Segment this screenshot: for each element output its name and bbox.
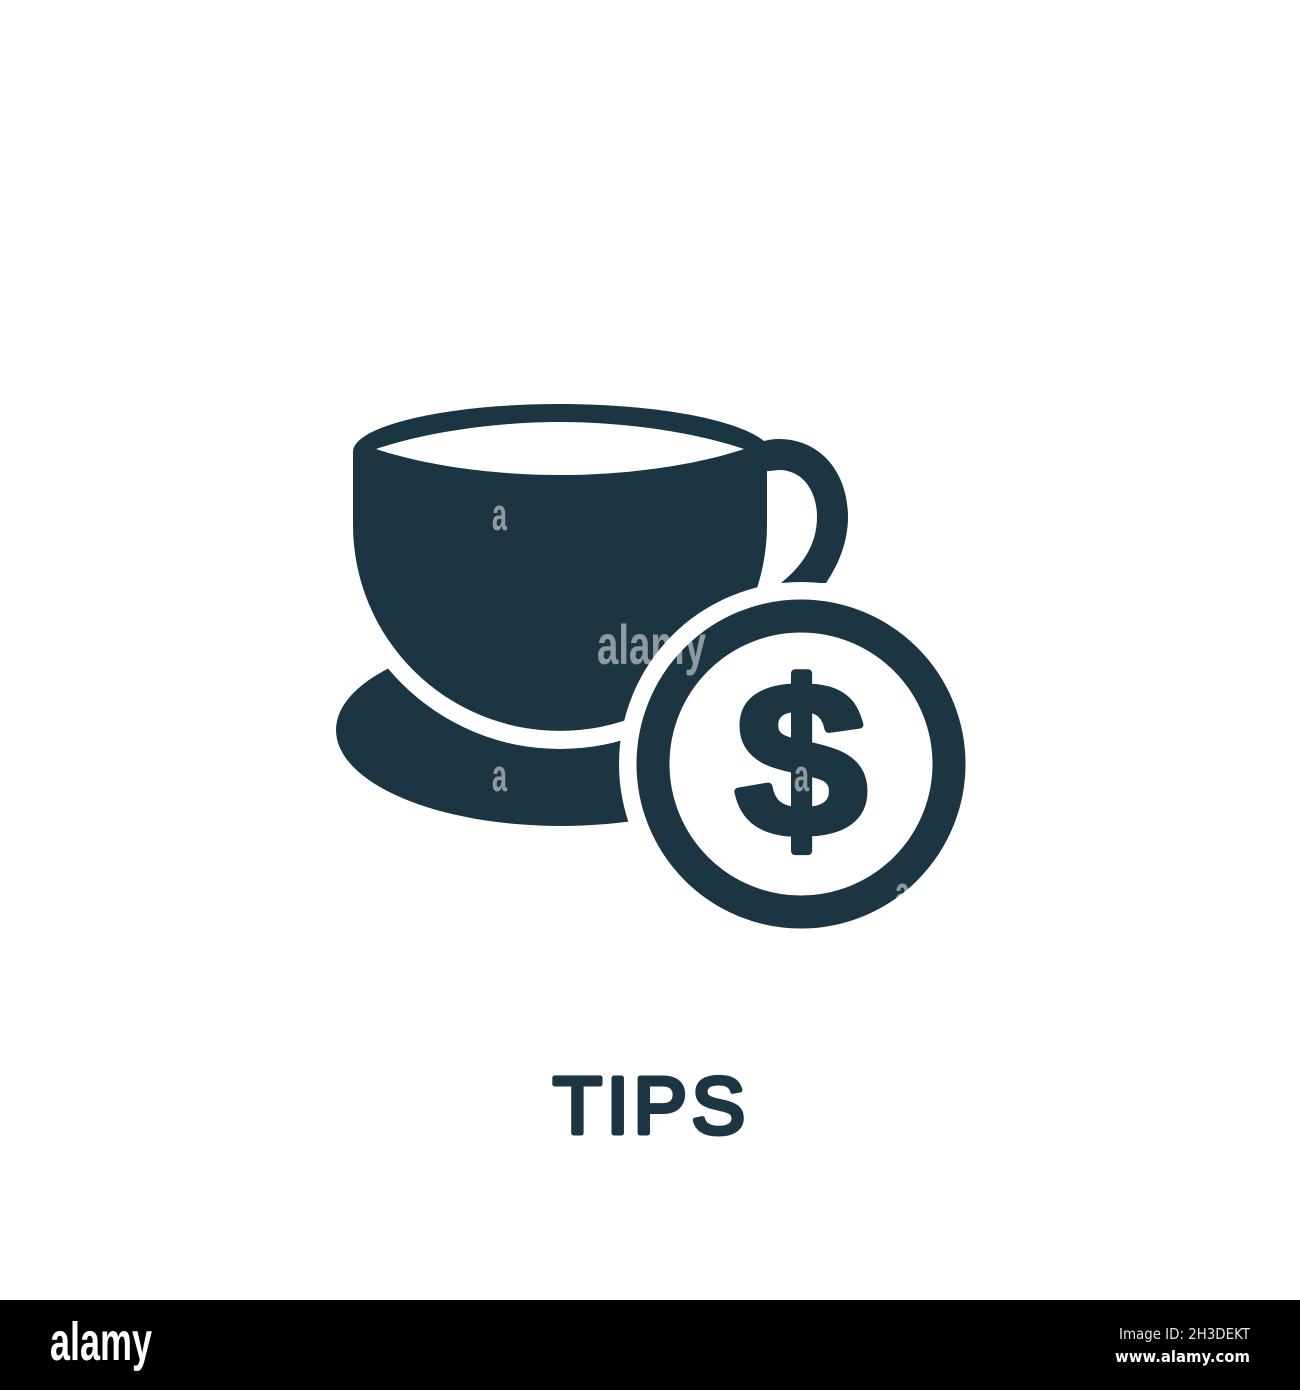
watermark: alamy marks xyxy=(492,489,911,918)
watermark: alamy marks: a xyxy=(895,867,911,918)
icon: tea cup with coin xyxy=(336,301,983,946)
icon: cup handle xyxy=(755,439,848,583)
icon: cup opening xyxy=(376,422,744,475)
icon: cup saucer xyxy=(336,301,786,826)
footer logo: alamy: alamy xyxy=(50,1312,152,1372)
footer text: image id: Image ID: 2H3DEKT xyxy=(1119,1325,1251,1343)
watermark: alamy marks: a xyxy=(492,489,508,540)
watermark: alamy marks: a xyxy=(492,750,508,801)
icon: cup body xyxy=(353,404,767,731)
heading: TIPS: TIPS xyxy=(553,1061,745,1150)
icon: dollar coin: $ xyxy=(736,639,866,882)
footer text: website: www.alamy.com xyxy=(1115,1347,1250,1366)
watermark: alamy marks: alamy xyxy=(597,613,706,676)
icon: dollar coin xyxy=(619,582,983,946)
footer bar xyxy=(0,1300,1300,1390)
watermark: alamy marks: a xyxy=(794,750,810,801)
